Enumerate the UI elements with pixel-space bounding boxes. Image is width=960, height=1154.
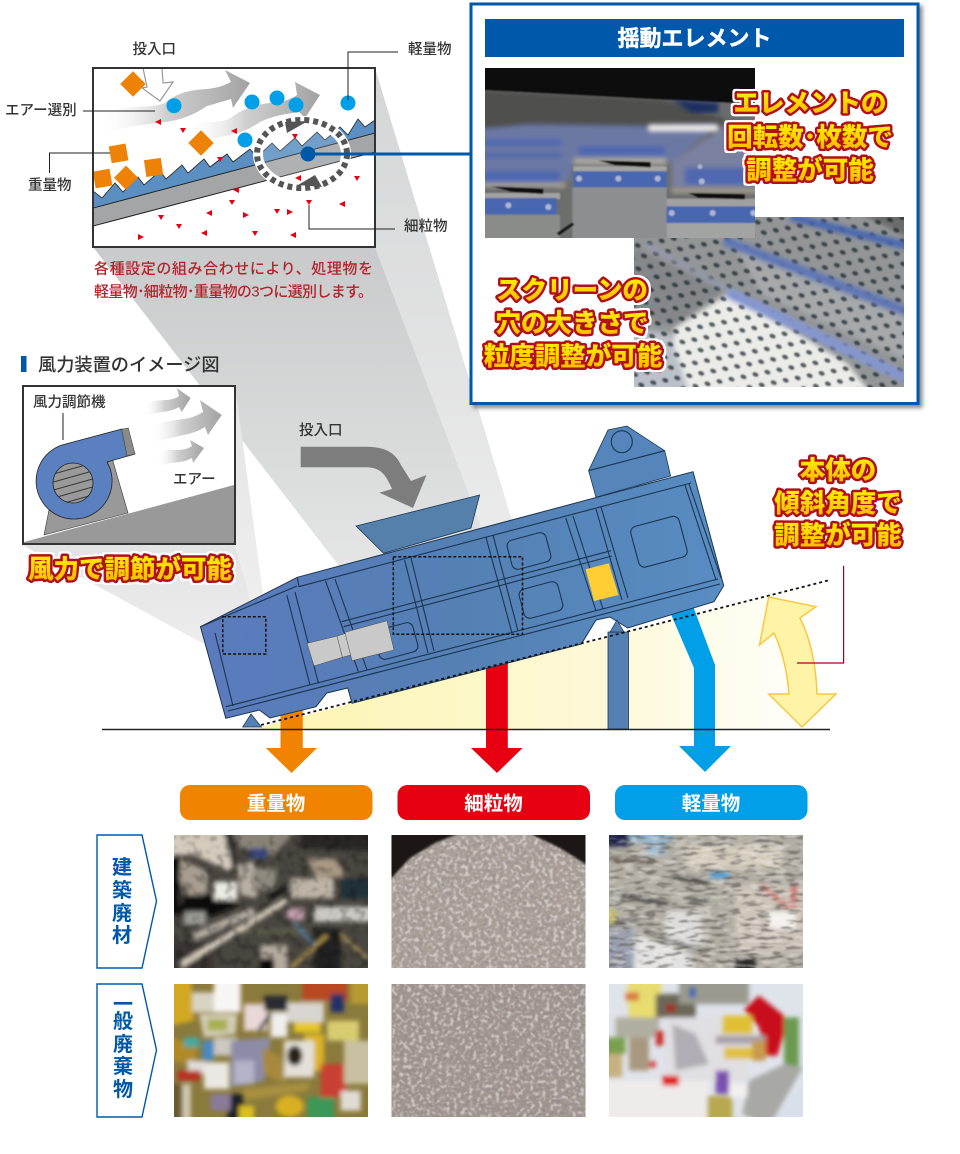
callout: incline adjust: 傾斜角度で <box>774 490 902 518</box>
incline area under dotted line <box>261 580 829 729</box>
arrow: fine material output <box>471 640 522 773</box>
callout: wind adjust: 風力で調節が可能 <box>28 555 232 584</box>
yellow panel <box>586 563 618 601</box>
callout: screen adjust: 粒度調整が可能 <box>484 342 663 371</box>
badge: fine <box>398 785 590 820</box>
row label: construction waste: 材 <box>112 924 132 947</box>
callout: incline adjust: 本体の <box>800 457 876 485</box>
photo: screen <box>634 217 904 387</box>
top lug with circle <box>589 426 671 497</box>
label: fine material: 細粒物 <box>404 218 448 235</box>
row label: general waste: 廃 <box>113 1033 133 1056</box>
label: inlet top: 投入口 <box>132 41 176 58</box>
callout: incline adjust <box>774 457 902 550</box>
photo: construction fine <box>392 835 586 968</box>
windows <box>373 515 689 661</box>
callout: screen adjust <box>484 277 663 371</box>
magnified ring <box>257 120 347 188</box>
pivots <box>243 620 624 727</box>
photo: general light <box>609 984 803 1117</box>
badge: light <box>615 785 808 820</box>
label: air sorting: エアー選別 <box>5 102 77 119</box>
hopper <box>356 495 480 553</box>
projection beam: fan image to machine <box>22 385 266 654</box>
light material circles <box>166 90 356 148</box>
wavy air arrows <box>143 388 222 468</box>
fine material triangles <box>138 119 360 240</box>
callout: element adjust: エレメントの <box>733 90 887 118</box>
label: air: エアー <box>173 472 216 488</box>
gray screen deck <box>93 133 375 226</box>
gray motor <box>307 621 394 666</box>
photo: construction light <box>609 835 803 968</box>
arrow: light material output <box>670 606 731 772</box>
dotted incline line <box>261 580 830 725</box>
badge: heavy <box>180 785 372 820</box>
row label: construction waste: 廃 <box>112 902 132 925</box>
photo: elements <box>485 68 755 238</box>
photo: general fine <box>392 984 586 1117</box>
dashed box: air section <box>223 617 266 654</box>
fan base <box>44 451 128 535</box>
label: inlet: 投入口 <box>299 422 342 439</box>
main housing <box>200 472 724 718</box>
label: blower: 風力調節機 <box>33 393 106 411</box>
badge: fine: 細粒物 <box>464 793 523 815</box>
row label: construction waste <box>97 835 156 968</box>
photo: general heavy <box>174 984 368 1117</box>
dashed box: element section <box>393 557 522 634</box>
panel: swing element <box>470 2 926 411</box>
projection beam: top diagram to machine <box>93 68 523 636</box>
connector: element to panel <box>300 146 472 162</box>
description text <box>94 260 373 300</box>
row label: general waste <box>97 984 156 1117</box>
description text: 軽量物･細粒物･重量物の3つに選別します。 <box>94 284 373 300</box>
machine body <box>200 426 724 727</box>
panel: sorting diagram <box>93 68 375 247</box>
badge: heavy: 重量物 <box>247 793 305 815</box>
row label: general waste: 一 <box>113 994 133 1016</box>
description text: 各種設定の組み合わせにより、処理物を <box>94 260 373 278</box>
row label: general waste: 棄 <box>113 1055 133 1078</box>
arrow: heavy material output <box>266 700 317 773</box>
support leg <box>608 632 628 729</box>
heading: wind device image: 風力装置のイメージ図 <box>38 355 220 375</box>
fan body <box>36 428 135 519</box>
ring arrows <box>285 121 322 187</box>
row label: construction waste: 建 <box>112 856 132 879</box>
ground slope <box>24 485 234 544</box>
badge: light: 軽量物 <box>682 793 740 815</box>
photo: construction heavy <box>174 835 368 968</box>
title bar <box>485 19 904 57</box>
callout: screen adjust: 穴の大きさで <box>495 310 649 338</box>
blue screen teeth <box>93 119 375 208</box>
double arrow: angle <box>760 597 836 727</box>
callout: element adjust <box>727 90 893 185</box>
air arrows <box>126 70 320 138</box>
row label: general waste: 般 <box>113 1010 133 1033</box>
callout: element adjust: 調整が可能 <box>746 156 874 185</box>
leader: blower <box>62 413 64 440</box>
row label: general waste: 物 <box>113 1078 133 1101</box>
structural lines <box>200 483 721 711</box>
panel: wind device <box>23 386 235 544</box>
callout: screen adjust: スクリーンの <box>496 277 648 305</box>
callout: incline adjust: 調整が可能 <box>774 521 902 550</box>
heavy material squares <box>93 71 214 190</box>
ground line <box>102 728 830 730</box>
row label: construction waste: 築 <box>112 879 132 902</box>
title bar: 揺動エレメント <box>617 26 772 51</box>
callout: element adjust: 回転数･枚数で <box>727 124 893 152</box>
label: light material top: 軽量物 <box>408 41 452 58</box>
arrow: inlet <box>301 447 426 508</box>
leader line: angle callout <box>797 566 844 663</box>
leader lines: sorting diagram <box>50 52 398 229</box>
label: heavy material: 重量物 <box>28 177 72 194</box>
inlet arrow outline <box>142 68 173 101</box>
